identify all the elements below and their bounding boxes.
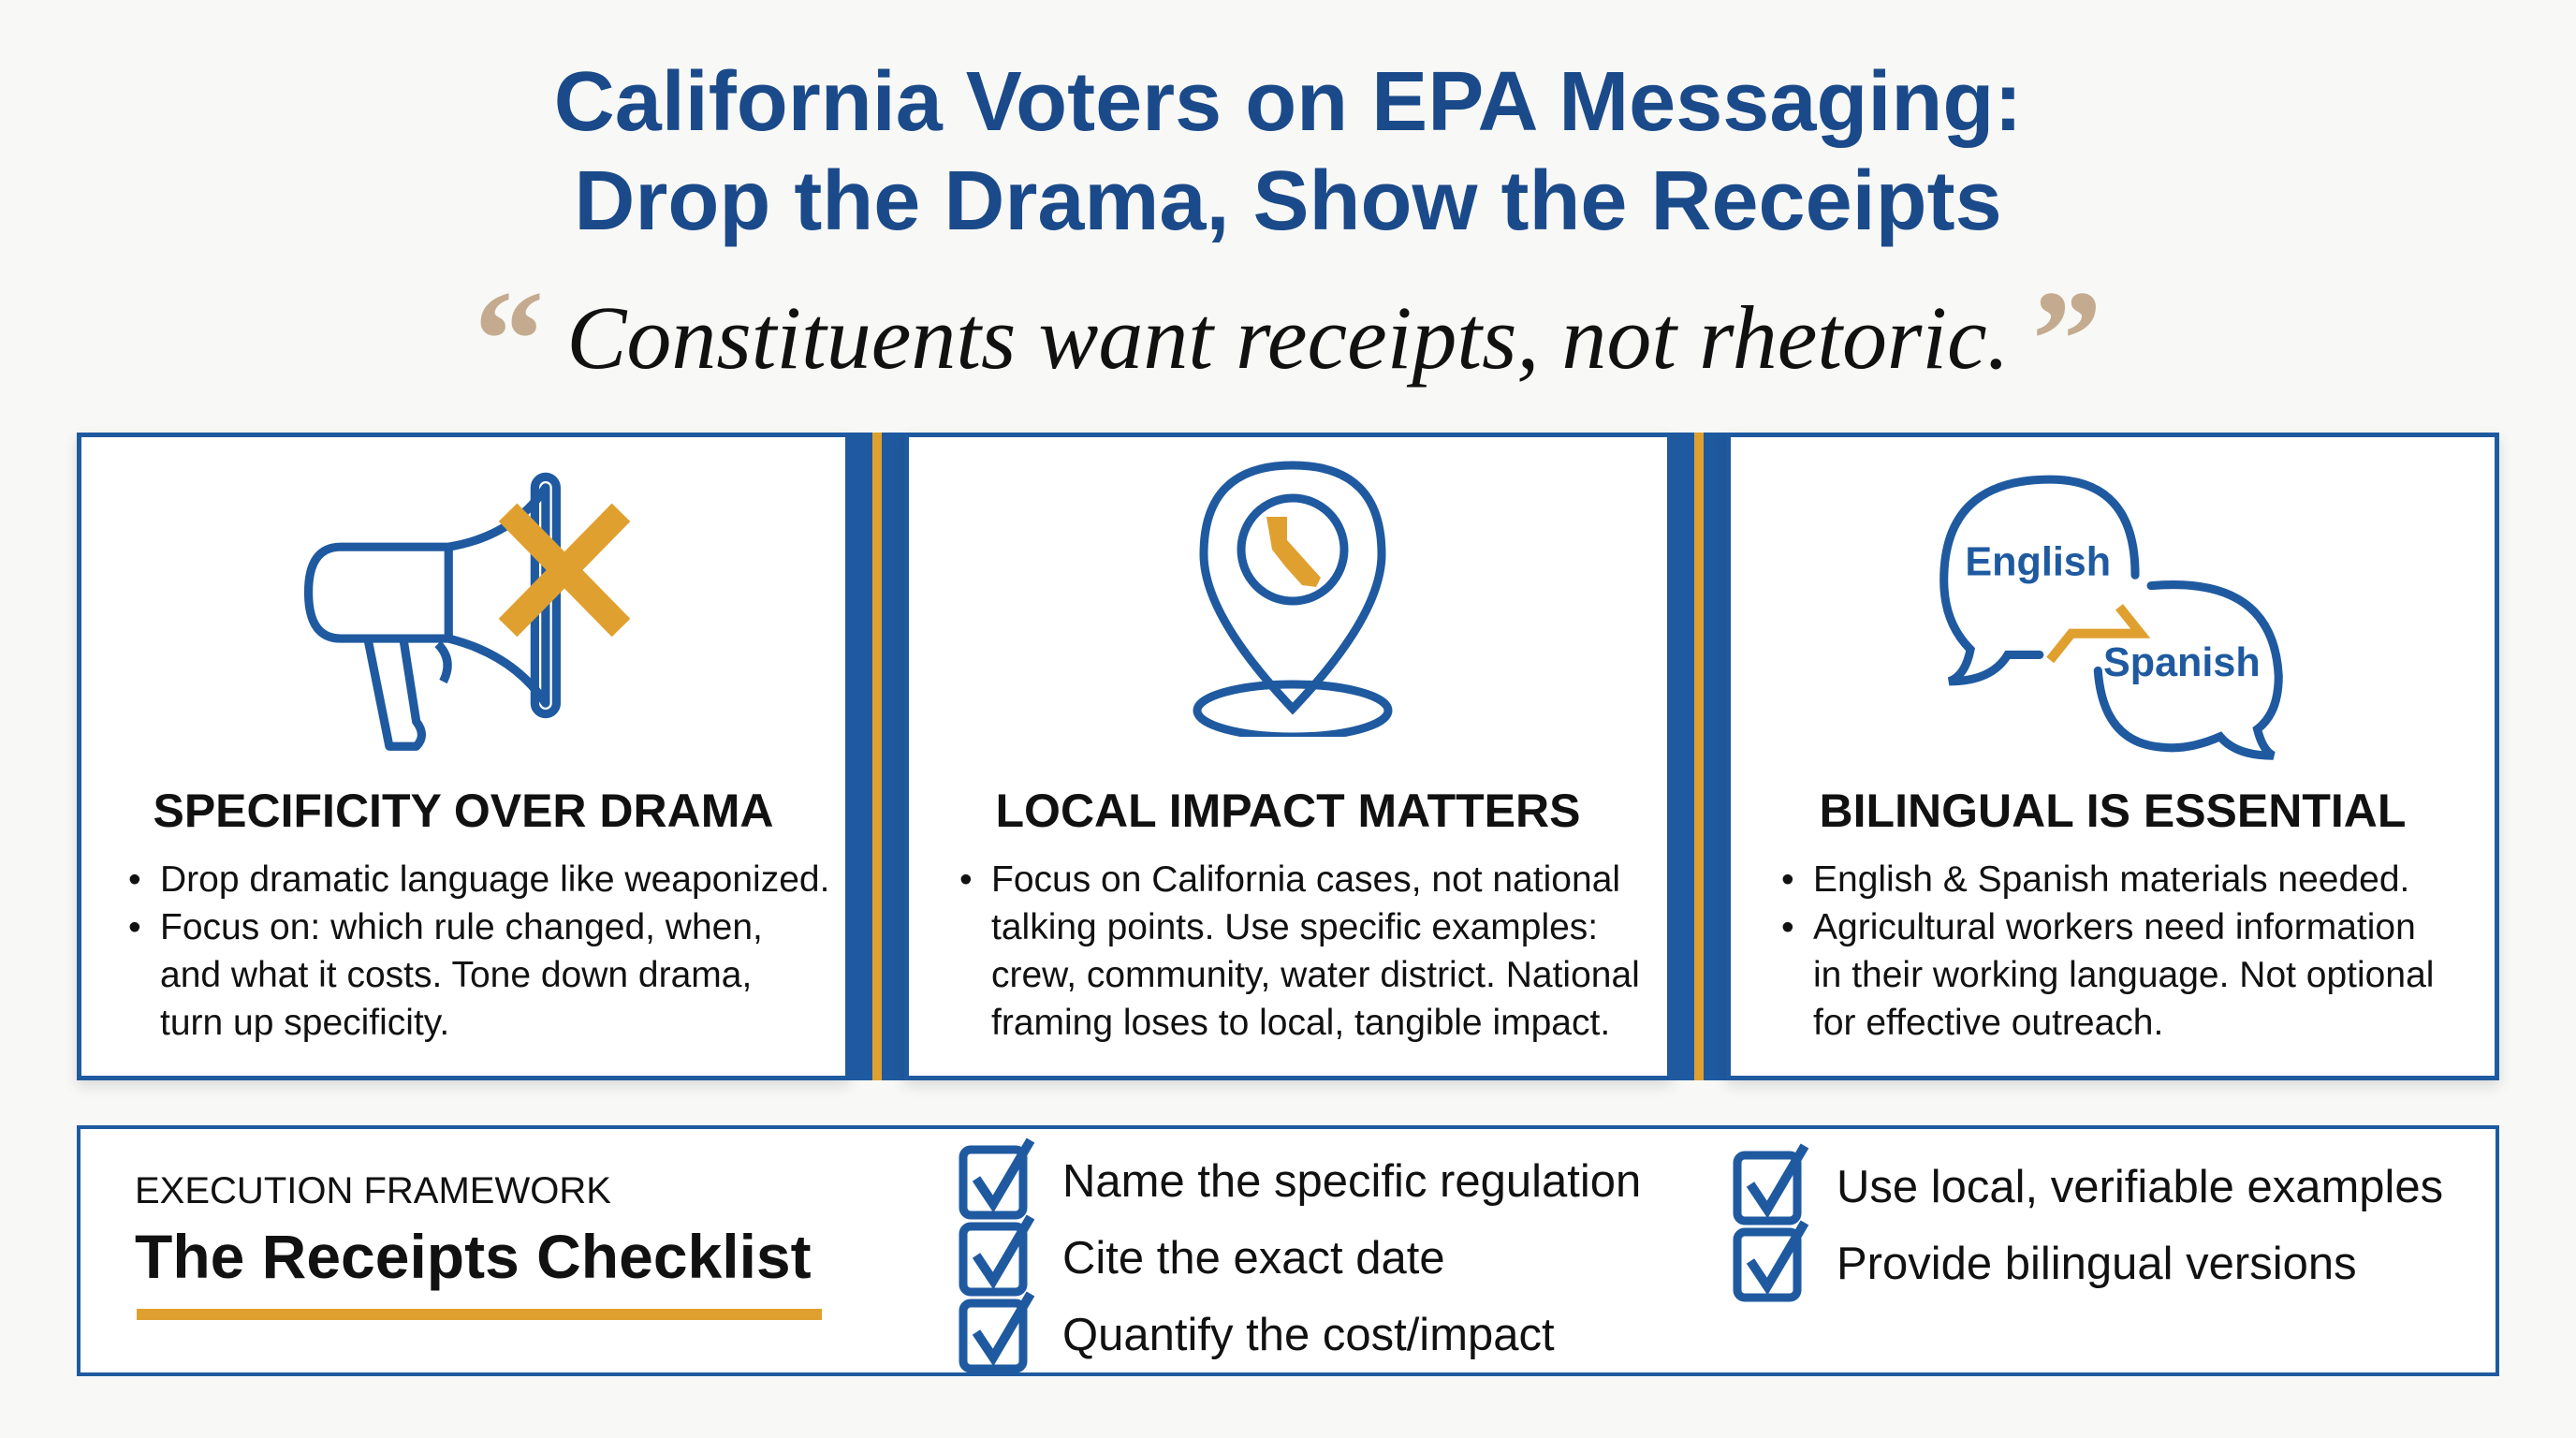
bullets: Drop dramatic language like weaponized. [160,859,829,900]
bullets: Agricultural workers need information [1813,907,2416,947]
divider strip [1672,433,1726,1080]
icon: speech bubbles: Spanish [2103,640,2261,685]
panel: specificity over drama [77,433,850,1080]
bullets: talking points. Use specific examples: [991,907,1598,947]
panel: receipts checklist [77,1125,2499,1376]
heading: The Receipts Checklist [135,1222,812,1291]
icon: muted megaphone [303,472,631,751]
bullets [960,859,1640,1043]
heading: BILINGUAL IS ESSENTIAL [1820,785,2406,837]
bullets: Focus on California cases, not national [991,859,1620,900]
bullets: English & Spanish materials needed. [1813,859,2409,900]
bullets: and what it costs. Tone down drama, [160,955,752,995]
checklist item: Provide bilingual versions [1837,1239,2357,1289]
underline accent [137,1309,822,1320]
icon: map pin with California [1193,461,1393,737]
icon: speech bubbles: English [1965,539,2111,584]
heading: LOCAL IMPACT MATTERS [996,785,1580,837]
bullets: in their working language. Not optional [1813,955,2434,995]
bullets: Focus on: which rule changed, when, [160,907,763,947]
heading: SPECIFICITY OVER DRAMA [153,785,774,837]
bullets: turn up specificity. [160,1003,449,1043]
bullets [1782,859,2434,1043]
checklist item: Use local, verifiable examples [1837,1162,2443,1212]
checklist item [959,1215,1445,1296]
bullets: framing loses to local, tangible impact. [991,1003,1610,1043]
panel: bilingual [1726,433,2499,1080]
quote: “ Constituents want receipts, not rhetoric. ” [474,262,2102,418]
checklist item [959,1138,1641,1219]
icon: speech bubbles [1939,476,2283,760]
checklist item: Cite the exact date [1062,1233,1445,1284]
checklist item [1734,1221,2357,1301]
title [554,55,2022,248]
title: Drop the Drama, Show the Receipts [574,154,2002,248]
checklist item: Quantify the cost/impact [1062,1310,1555,1360]
bullets: for effective outreach. [1813,1003,2163,1043]
checklist item: Name the specific regulation [1062,1156,1641,1207]
divider strip [850,433,904,1080]
panel: local impact [904,433,1672,1080]
checklist item [959,1292,1555,1372]
checklist item [1734,1144,2443,1225]
bullets: crew, community, water district. National [991,955,1640,995]
label: EXECUTION FRAMEWORK [135,1170,611,1211]
title: California Voters on EPA Messaging: [554,55,2022,149]
bullets [129,859,829,1043]
